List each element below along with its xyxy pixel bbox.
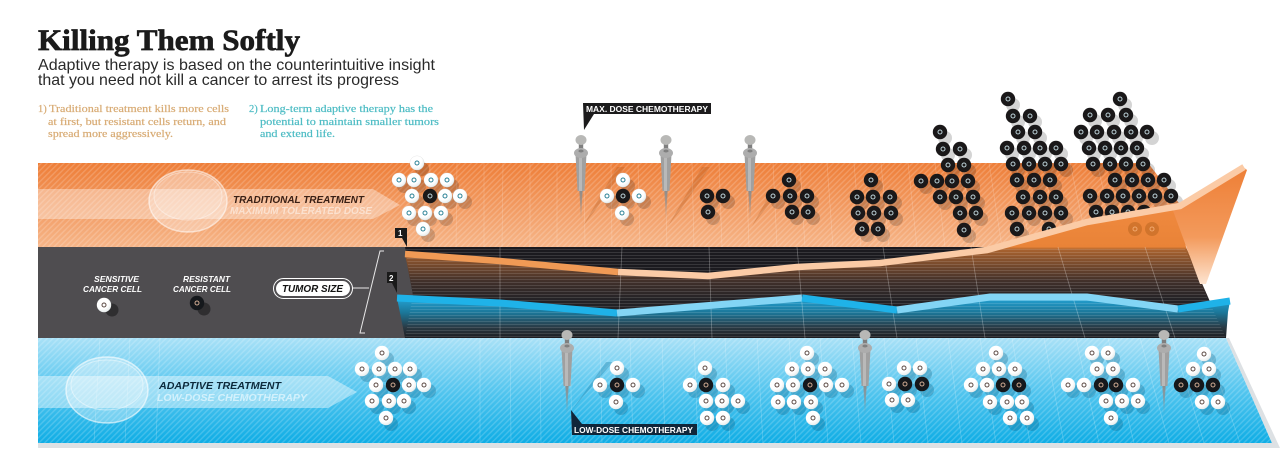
label: tumor size pill and bracket — [274, 251, 384, 333]
syringe: low dose 1 — [560, 330, 613, 416]
icon: petri dish adaptive arrow — [38, 357, 357, 423]
marker: 1 — [395, 228, 407, 247]
note 2: adaptive therapy: Long-term adaptive therapy has the — [260, 104, 433, 115]
note 1: traditional treatment: Traditional treatment kills more cells — [49, 104, 229, 115]
wedge: orange line right end — [1172, 167, 1247, 284]
cells: adaptive stage 8 — [1174, 347, 1230, 415]
subtitle: that you need not kill a cancer to arrest its progress — [38, 72, 399, 89]
cells: adaptive stage 4 — [770, 346, 854, 431]
note 2: adaptive therapy: potential to maintain smaller tumors — [260, 117, 439, 128]
note 2: adaptive therapy: and extend life. — [260, 129, 335, 140]
chart: adaptive treatment area — [397, 297, 1230, 338]
cells: traditional after dose 3 — [766, 173, 820, 225]
chart: traditional treatment area — [405, 206, 1226, 338]
icon: petri dish traditional arrow — [38, 170, 400, 232]
marker: 2: 2 — [389, 274, 394, 283]
line: adaptive treatment tumor size — [397, 297, 1230, 313]
heading: traditional treatment: MAXIMUM TOLERATED DOSE — [230, 206, 372, 217]
cells: adaptive stage 2 — [593, 361, 645, 415]
panel: legend background — [38, 247, 420, 338]
cells: adaptive stage 6 — [964, 346, 1039, 431]
cells: adaptive initial tumor — [355, 346, 436, 431]
marker: 1: 1 — [398, 229, 403, 238]
cells: traditional after dose 2 — [700, 189, 735, 225]
note 1: traditional treatment: spread more aggressively. — [48, 129, 173, 140]
subtitle: Adaptive therapy is based on the counterintuitive insight — [38, 57, 436, 74]
heading: adaptive treatment: ADAPTIVE TREATMENT — [158, 381, 282, 392]
heading: adaptive treatment: LOW-DOSE CHEMOTHERAPY — [157, 393, 308, 404]
legend: sensitive cancer cell: CANCER CELL — [83, 284, 142, 294]
panel: adaptive treatment band — [38, 338, 1272, 443]
bottom and right edge shadow — [38, 338, 1280, 448]
syringe: low dose 2 — [858, 330, 872, 416]
chart stripes — [405, 247, 1226, 338]
heading: traditional treatment — [230, 195, 372, 217]
chart: tumor size background — [405, 247, 1226, 338]
cells: traditional regrowth 4 — [1074, 92, 1183, 225]
legend: sensitive cancer cell — [83, 274, 142, 316]
subtitle — [38, 57, 436, 89]
panel: traditional treatment band — [38, 163, 1184, 247]
note 1: traditional treatment: at first, but resistant cells return, and — [48, 117, 227, 128]
legend: sensitive cancer cell: SENSITIVE — [94, 274, 139, 284]
cells: hidden ghost cells under traditional line — [1128, 222, 1159, 236]
marker: 2 — [387, 272, 397, 293]
label: tumor size pill and bracket: TUMOR SIZE — [282, 283, 344, 295]
note 2: adaptive therapy: 2) — [249, 104, 258, 115]
callout: low dose chemotherapy — [571, 410, 697, 435]
heading: adaptive treatment — [157, 381, 308, 404]
line: traditional treatment tumor size — [405, 167, 1244, 276]
cells: traditional regrowth 3 — [1000, 92, 1073, 242]
cells: adaptive stage 5 — [882, 361, 934, 413]
legend: resistant cancer cell: RESISTANT — [183, 274, 231, 284]
legend: resistant cancer cell: CANCER CELL — [173, 284, 231, 294]
syringe: low dose 3 — [1157, 330, 1171, 416]
heading: traditional treatment: TRADITIONAL TREATMENT — [233, 195, 365, 206]
title: Killing Them Softly — [38, 24, 300, 57]
note 2: adaptive therapy — [249, 104, 439, 140]
legend: resistant cancer cell — [173, 274, 231, 316]
cells: adaptive stage 7 — [1061, 346, 1150, 431]
syringe: max dose 1 — [574, 135, 625, 226]
note 1: traditional treatment: 1) — [38, 104, 47, 115]
cells: traditional regrowth 1 — [850, 173, 903, 242]
callout: low dose chemotherapy: LOW-DOSE CHEMOTHERAPY — [574, 426, 694, 435]
cells: traditional regrowth 2 — [914, 125, 988, 243]
syringe: max dose 3 — [743, 135, 780, 226]
syringe: max dose 2 — [659, 135, 710, 226]
note 1: traditional treatment — [38, 104, 229, 140]
callout: max dose chemotherapy — [583, 103, 711, 130]
cells: traditional after dose 1 — [600, 173, 651, 226]
cells: adaptive stage 3 — [683, 361, 750, 431]
cells: traditional initial tumor — [392, 156, 472, 242]
callout: max dose chemotherapy: MAX. DOSE CHEMOTHERAPY — [586, 105, 709, 114]
